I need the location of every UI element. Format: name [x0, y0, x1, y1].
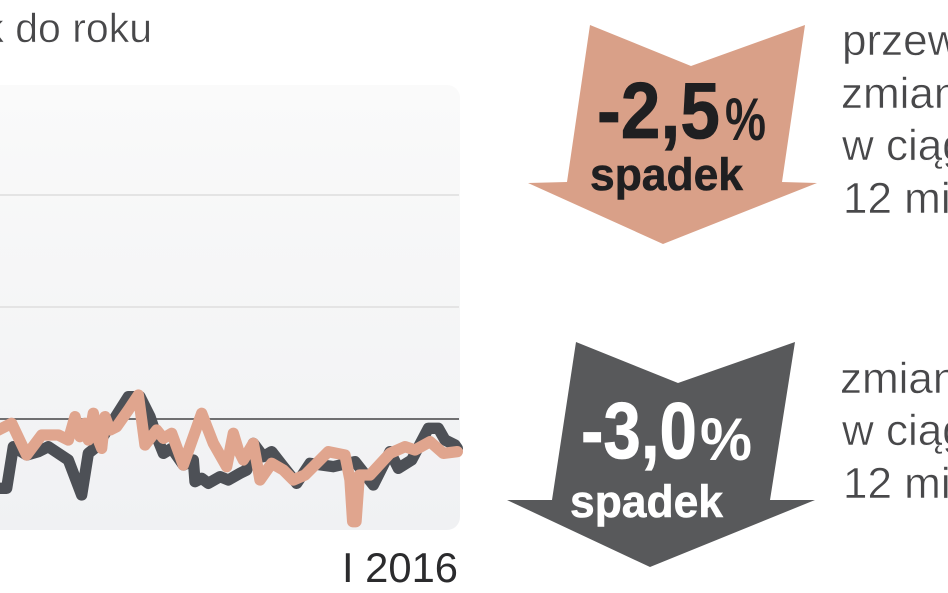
chart panel background: [0, 85, 460, 530]
description: actual: [840, 354, 948, 508]
label spadek: spadek: [570, 476, 724, 527]
label spadek: spadek: [590, 149, 744, 200]
description: forecast: [841, 16, 948, 223]
callout: actual drop arrow: %: [700, 406, 752, 473]
salmon line: forecast change: [0, 395, 457, 522]
zero baseline: [0, 418, 459, 420]
series lines: [0, 395, 457, 522]
salmon arrow: [528, 25, 817, 244]
callout: forecast drop arrow: %: [725, 86, 766, 153]
x axis label: I 2016: [342, 544, 458, 591]
value -3,0%: -3,0: [581, 386, 697, 475]
dark line: actual change: [0, 397, 457, 495]
value -2,5%: -2,5: [597, 66, 720, 155]
dark arrow: [507, 342, 815, 567]
callout: actual drop arrow: [507, 342, 815, 567]
callout: forecast drop arrow: [528, 25, 817, 244]
chart: year-on-year change lines: [0, 85, 460, 530]
